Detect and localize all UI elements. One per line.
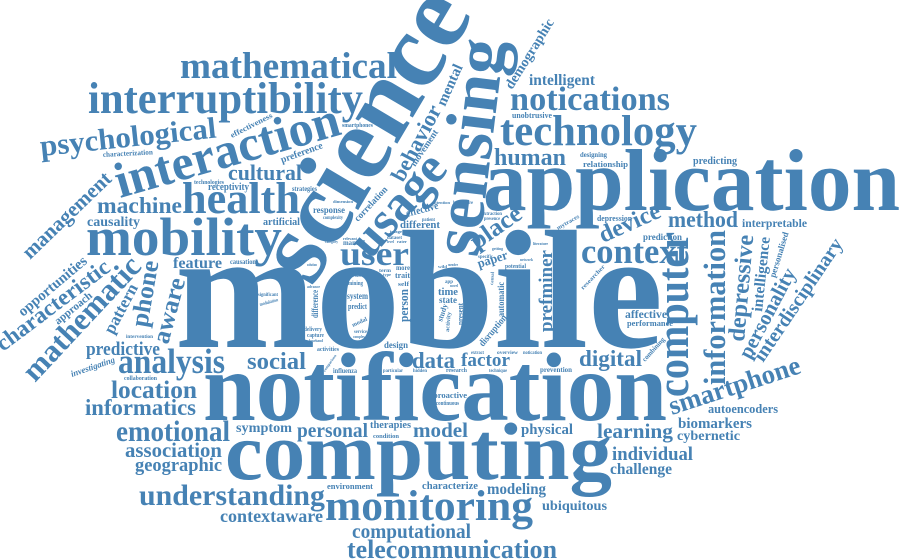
central small words: level xyxy=(387,239,395,244)
central small words: literature xyxy=(533,241,548,246)
word: computer: computer xyxy=(648,232,698,397)
central small words: activities xyxy=(317,347,340,353)
word: understanding: understanding xyxy=(139,479,325,512)
left-side words: opportunities xyxy=(15,253,91,320)
lower small words: challenge xyxy=(610,461,672,478)
right-side words: performance xyxy=(627,319,673,328)
word: health: health xyxy=(182,174,300,223)
central small words: prevention xyxy=(540,365,573,374)
lower small words: ubiquitous xyxy=(542,499,608,514)
lower small words: physical xyxy=(521,422,573,438)
central small words: manual xyxy=(343,239,365,247)
left-side words: analysis xyxy=(118,342,225,381)
lower small words: environment xyxy=(327,482,373,491)
central small words: hidden xyxy=(413,369,427,374)
word: technology: technology xyxy=(500,108,697,155)
word: interruptibility: interruptibility xyxy=(88,74,363,123)
lower small words: personal xyxy=(297,420,368,442)
central small words: place xyxy=(465,200,527,255)
central small words: design xyxy=(384,340,408,350)
left-side words: strategies xyxy=(292,185,317,193)
central small words: paper xyxy=(475,247,510,271)
central small words: advance xyxy=(307,284,320,289)
central small words: dataset xyxy=(387,236,402,241)
central small words: wild xyxy=(438,264,448,269)
right-side words: designing xyxy=(580,151,607,159)
right-side words: mytraces xyxy=(556,214,581,232)
lower small words: autoencoders xyxy=(708,402,778,416)
right-side words: method xyxy=(668,207,738,232)
left-side words: pattern xyxy=(100,280,142,337)
lower small words: symptom xyxy=(236,421,292,436)
central small words: influenza xyxy=(333,367,357,375)
central small words: relevant xyxy=(343,236,358,241)
word: mobility: mobility xyxy=(86,207,282,267)
left-side words: characterization xyxy=(103,147,154,159)
central small words: disruption xyxy=(477,312,510,349)
word: computing: computing xyxy=(225,406,612,497)
central small words: technique xyxy=(489,369,508,374)
word: user: user xyxy=(340,236,409,273)
central small words: specific xyxy=(478,255,494,260)
central small words: causal xyxy=(490,271,496,285)
lower small words: modeling xyxy=(487,481,546,498)
central small words: service xyxy=(354,330,368,335)
lower small words: condition xyxy=(373,433,399,440)
central small words: correlation xyxy=(353,185,391,224)
central small words: state xyxy=(439,295,457,305)
central small words: mining xyxy=(348,281,363,287)
central small words: trait xyxy=(395,271,410,280)
central small words: overview xyxy=(497,351,518,356)
central small words: significant xyxy=(258,293,278,298)
central small words: presence xyxy=(484,217,501,222)
central small words: novel xyxy=(450,283,459,288)
central small words: time xyxy=(438,286,458,298)
central small words: potential xyxy=(505,264,526,270)
central small words: predict xyxy=(348,302,367,311)
central small words: research xyxy=(446,368,468,374)
right-side words: human xyxy=(494,145,566,171)
central small words: comparison xyxy=(322,353,338,373)
word: sensing: sensing xyxy=(417,34,520,260)
central small words: complex xyxy=(353,334,365,339)
right-side words: intelligent xyxy=(529,72,596,89)
right-side words: personality xyxy=(733,263,801,362)
left-side words: machine xyxy=(97,193,182,219)
central small words: baseband xyxy=(309,338,324,343)
central small words: short xyxy=(355,274,362,278)
left-side words: causality xyxy=(87,215,140,230)
left-side words: phone xyxy=(126,258,165,329)
central small words: category xyxy=(325,239,338,244)
word: notications: notications xyxy=(510,81,670,118)
central small words xyxy=(247,16,573,407)
left-side words: aware xyxy=(148,275,191,347)
central small words: factor xyxy=(461,350,511,371)
word: mobile: mobile xyxy=(175,196,663,384)
lower small words: contextaware xyxy=(220,506,323,526)
central small words: mental xyxy=(434,62,467,109)
right-side words: intelligence xyxy=(749,236,774,312)
left-side words: emotional xyxy=(116,415,230,448)
central small words: patient xyxy=(422,218,435,223)
lower small words: digital xyxy=(579,346,642,371)
lower small words: biomarkers xyxy=(678,416,752,432)
right-side words: personalised xyxy=(767,231,791,279)
lower small words: therapies xyxy=(370,420,411,431)
central small words: attention xyxy=(433,200,451,205)
central small words: activity xyxy=(445,312,453,332)
lower small words: learning xyxy=(597,419,674,443)
central small words: prefminer xyxy=(536,249,557,332)
right-side words: depression xyxy=(597,213,632,223)
central small words: difference xyxy=(310,290,320,318)
central small words: present xyxy=(456,303,465,325)
word: smartphone: smartphone xyxy=(665,350,804,421)
left-side words: intervention xyxy=(126,335,153,340)
central small words: modal xyxy=(351,316,369,329)
central small words: extract xyxy=(471,351,484,356)
right-side words: predicting xyxy=(693,155,737,167)
left-side words: artificial xyxy=(263,216,300,228)
right-side words: interpretable xyxy=(742,216,808,230)
central small words: healthcare xyxy=(453,201,474,206)
word: mathematical: mathematical xyxy=(180,46,397,87)
left-side words: management xyxy=(17,166,116,264)
left-side words: receptivity xyxy=(208,182,249,193)
word: application: application xyxy=(483,133,900,230)
word: monitoring: monitoring xyxy=(325,483,533,530)
word: interaction: interaction xyxy=(108,91,346,209)
central small words: getting xyxy=(492,246,503,251)
right-side words: unobtrusive xyxy=(512,111,552,120)
right-side words xyxy=(494,72,848,385)
left-side words: smartphones xyxy=(342,123,374,129)
left-side words: cultural xyxy=(228,160,302,185)
right-side words: interdisciplinary xyxy=(749,234,848,366)
central small words: system xyxy=(347,291,368,301)
central small words: app xyxy=(445,280,453,285)
central small words: demographic xyxy=(503,16,558,92)
lower small words: cybernetic xyxy=(677,429,740,444)
left-side words: geographic xyxy=(135,456,222,476)
word: notification: notification xyxy=(203,334,667,442)
lower small words: computational xyxy=(352,519,471,543)
central small words: data xyxy=(412,348,455,373)
right-side words: prediction xyxy=(643,232,682,242)
left-side words: approach xyxy=(52,290,95,327)
left-side words: investigating xyxy=(69,354,117,379)
central small words: dimension xyxy=(333,199,354,204)
central small words: social xyxy=(247,349,306,375)
left-side words: causation xyxy=(230,258,256,266)
central small words: network xyxy=(520,257,534,262)
right-side words: device xyxy=(595,198,665,248)
right-side words: depressive xyxy=(724,233,759,343)
central small words: study xyxy=(435,303,449,323)
central small words: capture xyxy=(307,333,324,339)
lower small words xyxy=(220,346,778,543)
central small words: self xyxy=(398,282,410,288)
lower small words: characterize xyxy=(422,480,478,492)
left-side words: preference xyxy=(279,140,325,166)
right-side words: information xyxy=(697,230,732,385)
central small words: term xyxy=(379,269,392,274)
central small words: person xyxy=(396,288,411,322)
lower small words: model xyxy=(413,418,468,442)
central small words: extraction xyxy=(482,212,502,217)
central small words: continuous xyxy=(436,401,460,407)
left-side words: location xyxy=(111,377,197,404)
left-side words: collaboration xyxy=(124,376,158,382)
right-side words: affective xyxy=(625,307,668,321)
right-side words: relationship xyxy=(583,160,629,169)
central small words: member xyxy=(448,262,458,267)
word: psychological: psychological xyxy=(38,112,218,163)
central small words: movement xyxy=(409,128,441,169)
left-side words: effectiveness xyxy=(229,111,274,140)
left-side words: association xyxy=(125,438,222,462)
central small words: more xyxy=(396,264,410,272)
right-side words: researcher xyxy=(580,264,607,291)
central small words: effective xyxy=(405,200,440,220)
central small words: modulation xyxy=(259,298,279,308)
word: mathematic: mathematic xyxy=(15,248,148,388)
central small words: delivery xyxy=(304,327,322,333)
central small words: type xyxy=(383,272,391,277)
central small words: different xyxy=(400,219,440,231)
central small words: solution xyxy=(307,262,318,267)
central small words: automatic xyxy=(497,282,507,317)
left-side words: feature xyxy=(173,255,222,272)
lower small words: individual xyxy=(612,445,693,465)
word: usage: usage xyxy=(336,140,457,267)
central small words: response xyxy=(313,205,345,215)
central small words: proactive xyxy=(433,391,467,400)
left-side words: predictive xyxy=(86,339,160,360)
central small words: particular xyxy=(383,369,404,374)
central small words: rater xyxy=(397,239,407,244)
right-side words: combining xyxy=(641,335,667,363)
left-side words xyxy=(0,111,374,476)
central small words: notication xyxy=(523,351,542,356)
left-side words: technologies xyxy=(194,180,225,186)
central small words: behavior xyxy=(385,100,446,185)
central small words: complexity xyxy=(323,216,343,221)
central small words: image xyxy=(390,229,402,234)
left-side words: informatics xyxy=(85,395,196,420)
word: context: context xyxy=(581,232,688,271)
